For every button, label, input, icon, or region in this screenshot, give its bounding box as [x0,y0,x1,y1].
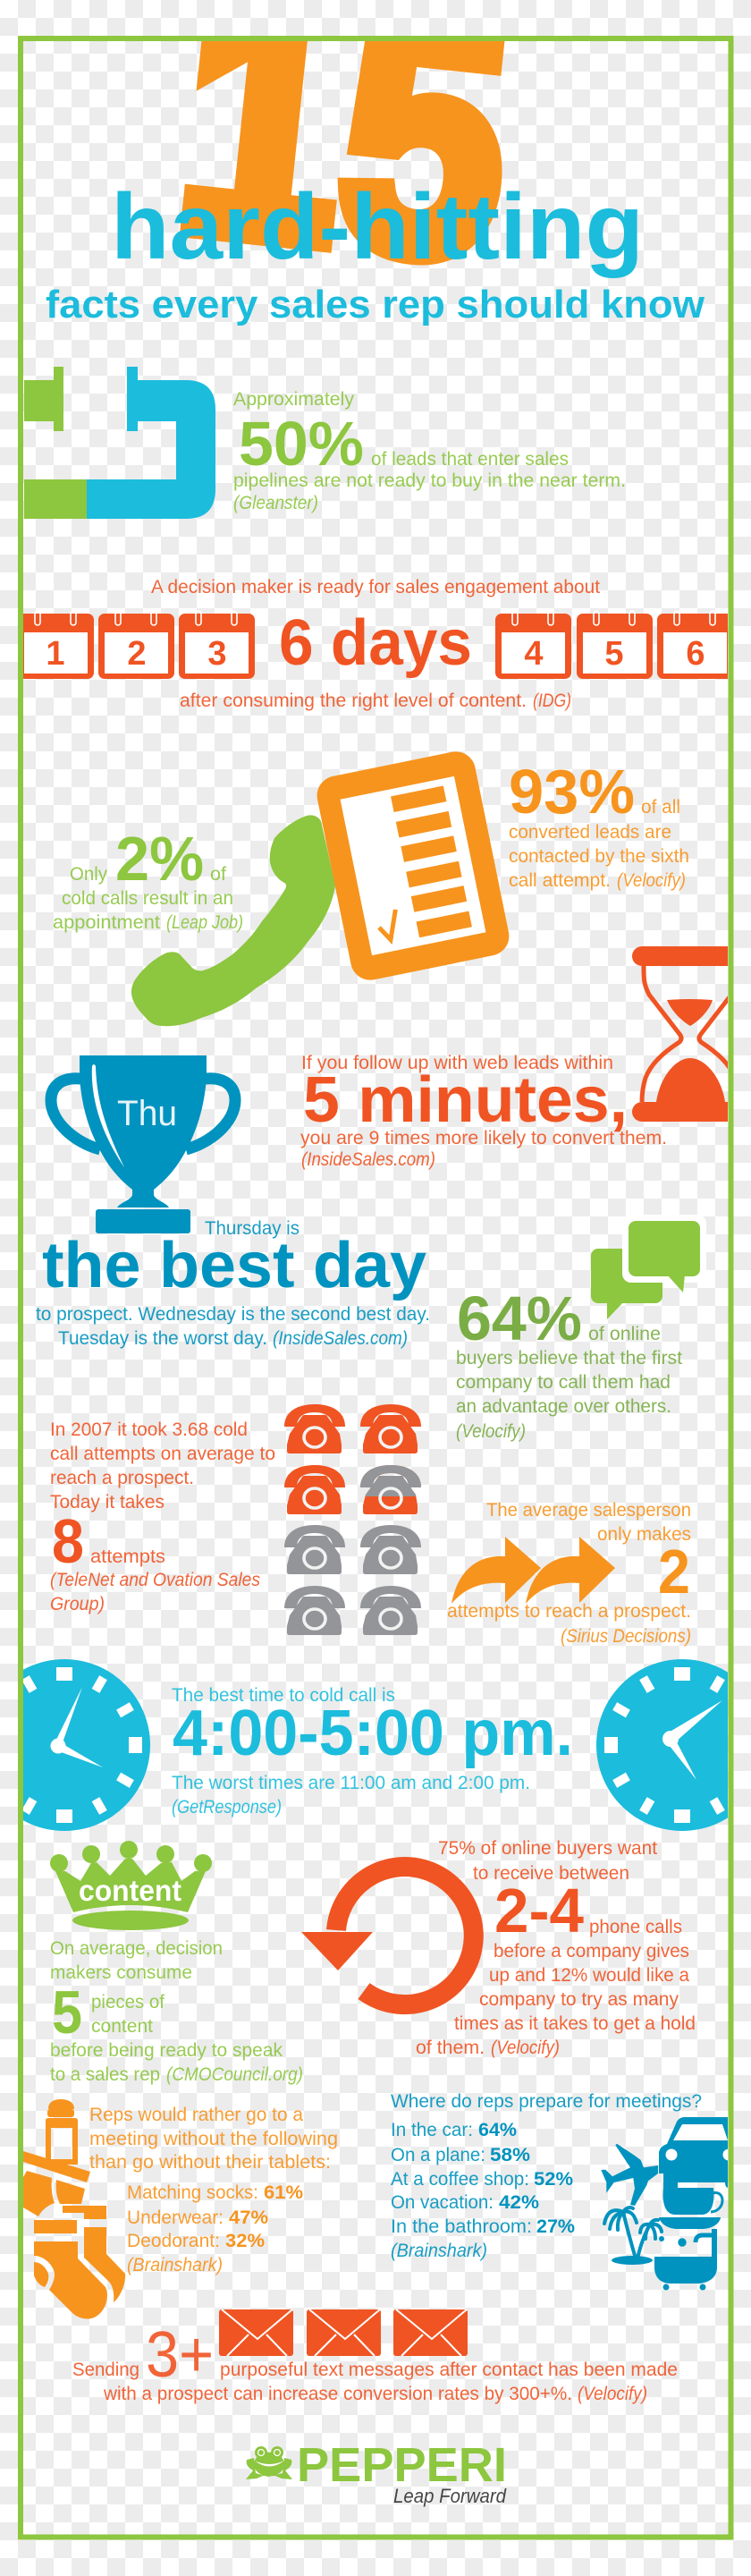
text: reps would rather: Underwear: [127,2207,224,2228]
calendars 4 to 6: 6 [686,635,705,673]
text: Thursday best day: Tuesday is the worst day. [58,1327,267,1349]
tagline: Leap Forward [393,2485,507,2507]
text: 2-4 phone calls: phone calls [589,1916,682,1937]
text: 5 pieces of content: pieces of [91,1991,165,2012]
text: 93% converted leads: contacted by the sixth [509,845,689,867]
text: 2-4 phone calls: of them. [416,2037,485,2058]
icon: speech bubbles [591,1215,706,1319]
text: 2-4 phone calls: 75% of online buyers want [438,1837,657,1859]
text: 2-4 phone calls: before a company gives [494,1940,689,1962]
text: 5 pieces of content: before being ready to speak [50,2039,283,2061]
text: where do reps prepare: 58% [490,2144,530,2165]
text: average salesperson 2 attempts: (Sirius Decisions) [561,1625,691,1647]
fact: pipeline 50% [24,367,626,519]
calendars 1 to 3: 1 [46,635,65,673]
text: 2% cold calls: (Leap Job) [166,911,243,933]
text: 8 attempts: 8 [52,1506,84,1576]
text: best time to cold call: (GetResponse) [172,1796,282,1818]
icon: content crown: content [79,1874,181,1907]
text: where do reps prepare [391,2090,702,2261]
text: reps would rather: (Brainshark) [127,2254,223,2275]
text: approximately 50%: of leads that enter sales [371,448,569,470]
text: sending 3+ text messages: 3+ [146,2319,214,2391]
text: 2% cold calls: of [210,863,226,885]
text: reps would rather: meeting without the following [89,2128,338,2149]
text: 2-4 phone calls: to receive between [473,1862,629,1884]
text: 2% cold calls: cold calls result in an [62,887,233,909]
text: 8 attempts: Today it takes [50,1491,165,1513]
text: reps would rather: Matching socks: [127,2182,258,2203]
text: 5 pieces of content: to a sales rep [50,2063,160,2085]
icon: green phone handset [131,815,335,1026]
text: 5 pieces of content: makers consume [50,1962,192,1983]
text: where do reps prepare: 27% [536,2216,575,2237]
text: sending 3+ text messages: Sending [72,2359,139,2380]
text: 5 minutes: you are 9 times more likely to convert them. [300,1127,667,1148]
text: 5 pieces of content: content [91,2015,153,2037]
icon: frog [246,2446,292,2479]
text: average salesperson 2 attempts [447,1499,691,1647]
text: 2-4 phone calls: times as it takes to get a hold [454,2012,696,2034]
text: 2% cold calls: appointment [53,911,160,933]
title block [46,41,705,326]
icon: content crown [50,1841,212,1930]
text: where do reps prepare: On a plane: [391,2144,485,2165]
calendars 4 to 6: 5 [604,635,624,673]
text: 5 minutes: (InsideSales.com) [301,1148,435,1170]
text: 93% converted leads [509,757,689,891]
text: 5 minutes: 5 minutes, [303,1064,628,1136]
text: 2% cold calls [53,824,243,933]
icon: car, plane, cup, palm trees and bathtub [601,2117,735,2290]
text: 5 minutes [300,1052,667,1170]
calendars 1 to 3: 2 [127,635,147,673]
text: 5 pieces of content [50,1937,303,2085]
icon: orange clipboard [314,748,512,984]
text: reps would rather: than go without their tablets: [89,2151,331,2173]
calendars 1 to 3 [18,611,255,679]
text: 64%: 64% [457,1284,582,1353]
text: 64%: company to call them had [456,1371,671,1393]
text: approximately 50%: Approximately [233,388,354,410]
icon: deodorant, underwear and socks [23,2099,125,2319]
text: best time to cold call: The best time to cold call is [172,1684,395,1706]
text: 64% [456,1284,682,1442]
text: average salesperson 2 attempts: only makes [597,1523,691,1545]
text: 93% converted leads: (Velocify) [617,869,686,891]
text: where do reps prepare: 64% [478,2119,517,2140]
text: average salesperson 2 attempts: 2 [658,1537,690,1606]
text: Thursday best day: to prospect. Wednesday is the second best day. [36,1303,430,1325]
heading: hard-hitting: hard-hitting [111,175,644,279]
text: where do reps prepare: Where do reps prepare for meetings? [391,2090,702,2112]
text: 93% converted leads: converted leads are [509,821,671,843]
text: 8 attempts: call attempts on average to [50,1443,275,1464]
text: 8 attempts [50,1419,275,1614]
text: 64%: of online [588,1323,661,1344]
text: where do reps prepare: On vacation: [391,2191,494,2213]
text: 2-4 phone calls [416,1837,696,2058]
text: Thursday best day: Thursday is [205,1217,300,1239]
text: 5 pieces of content: On average, decision [50,1937,223,1959]
icon: hourglass [632,946,728,1122]
icon: right clock [596,1659,728,1831]
calendars 1 to 3: 3 [207,635,227,673]
text: reps would rather: 47% [229,2207,268,2228]
calendars 4 to 6 [495,611,733,679]
text: Thursday best day: (InsideSales.com) [273,1327,408,1349]
text: sending 3+ text messages: (Velocify) [578,2383,647,2404]
logo: Pepperi [246,2438,507,2507]
text: where do reps prepare: 52% [534,2168,573,2190]
text: after consuming: after consuming the right level of content. [180,690,527,711]
text: 2-4 phone calls: 2-4 [494,1876,584,1945]
text: approximately 50% [233,388,626,513]
text: sending 3+ text messages [72,2319,678,2404]
text: sending 3+ text messages: purposeful text messages after contact has been made [220,2359,678,2380]
text: 93% converted leads: 93% [509,757,635,826]
text: 8 attempts: attempts [90,1546,165,1567]
text: 93% converted leads: of all [641,796,680,818]
text: average salesperson 2 attempts: The average salesperson [486,1499,691,1521]
text: Thursday best day [36,1217,430,1349]
text: best time to cold call: The worst times are 11:00 am and 2:00 pm. [172,1772,530,1793]
text: reps would rather: Reps would rather go to a [89,2104,303,2125]
text: 5 pieces of content: 5 [52,1979,82,2046]
text: where do reps prepare: At a coffee shop: [391,2168,529,2190]
text: where do reps prepare: In the bathroom: [391,2216,532,2237]
text: where do reps prepare: In the car: [391,2119,473,2140]
text: approximately 50%: pipelines are not ready to buy in the near term. [233,470,626,491]
text: 2% cold calls: 2% [115,824,204,894]
text: best time to cold call [172,1684,573,1818]
text: sending 3+ text messages: with a prospect can increase conversion rates by 300+%. [103,2383,572,2404]
text: 8 attempts: Group) [50,1593,105,1614]
icon: three envelopes [219,2309,468,2356]
icon: two orange arrows [451,1537,615,1604]
icon: trophy: Thu [117,1094,177,1133]
text: average salesperson 2 attempts: attempts to reach a prospect. [447,1600,691,1622]
text: 8 attempts: reach a prospect. [50,1467,194,1488]
subheading: facts every sales rep should know [46,283,705,326]
text: 5 minutes: If you follow up with web leads within [301,1052,613,1073]
text: 64%: an advantage over others. [456,1395,671,1417]
text: 2-4 phone calls: up and 12% would like a [489,1964,689,1986]
wordmark: PEPPERI [297,2438,507,2492]
icon: circular arrow [301,1867,474,2004]
text: Thursday best day: the best day [42,1230,426,1301]
text: best time to cold call: 4:00-5:00 pm. [173,1698,573,1769]
fact: 6 days [18,576,733,711]
text: reps would rather: 32% [225,2230,265,2251]
icon: grid of telephones [284,1404,421,1635]
text: 8 attempts: (TeleNet and Ovation Sales [50,1569,260,1590]
text: 93% converted leads: call attempt. [509,869,611,891]
text: decision maker: A decision maker is ready for sales engagement about [151,576,600,597]
text: after consuming: (IDG) [533,690,571,711]
text: 2-4 phone calls: (Velocify) [491,2037,560,2058]
text: where do reps prepare: 42% [499,2191,539,2213]
text: reps would rather [89,2104,338,2275]
text: 2% cold calls: Only [70,863,107,885]
text: approximately 50%: (Gleanster) [233,492,318,513]
text: 5 pieces of content: (CMOCouncil.org) [166,2063,303,2085]
big text: 6 days: 6 days [279,607,472,679]
text: approximately 50%: 50% [239,409,364,479]
text: where do reps prepare: (Brainshark) [391,2240,487,2261]
icon: left clock [23,1659,150,1831]
text: 64%: buyers believe that the first [456,1347,682,1368]
icon: trophy [51,1055,235,1233]
text: 64%: (Velocify) [456,1420,526,1442]
text: 8 attempts: In 2007 it took 3.68 cold [50,1419,248,1440]
text: reps would rather: 61% [264,2182,303,2203]
icon: pipe [24,367,215,519]
text: reps would rather: Deodorant: [127,2230,220,2251]
text: 2-4 phone calls: company to try as many [479,1988,679,2010]
calendars 4 to 6: 4 [524,635,544,673]
